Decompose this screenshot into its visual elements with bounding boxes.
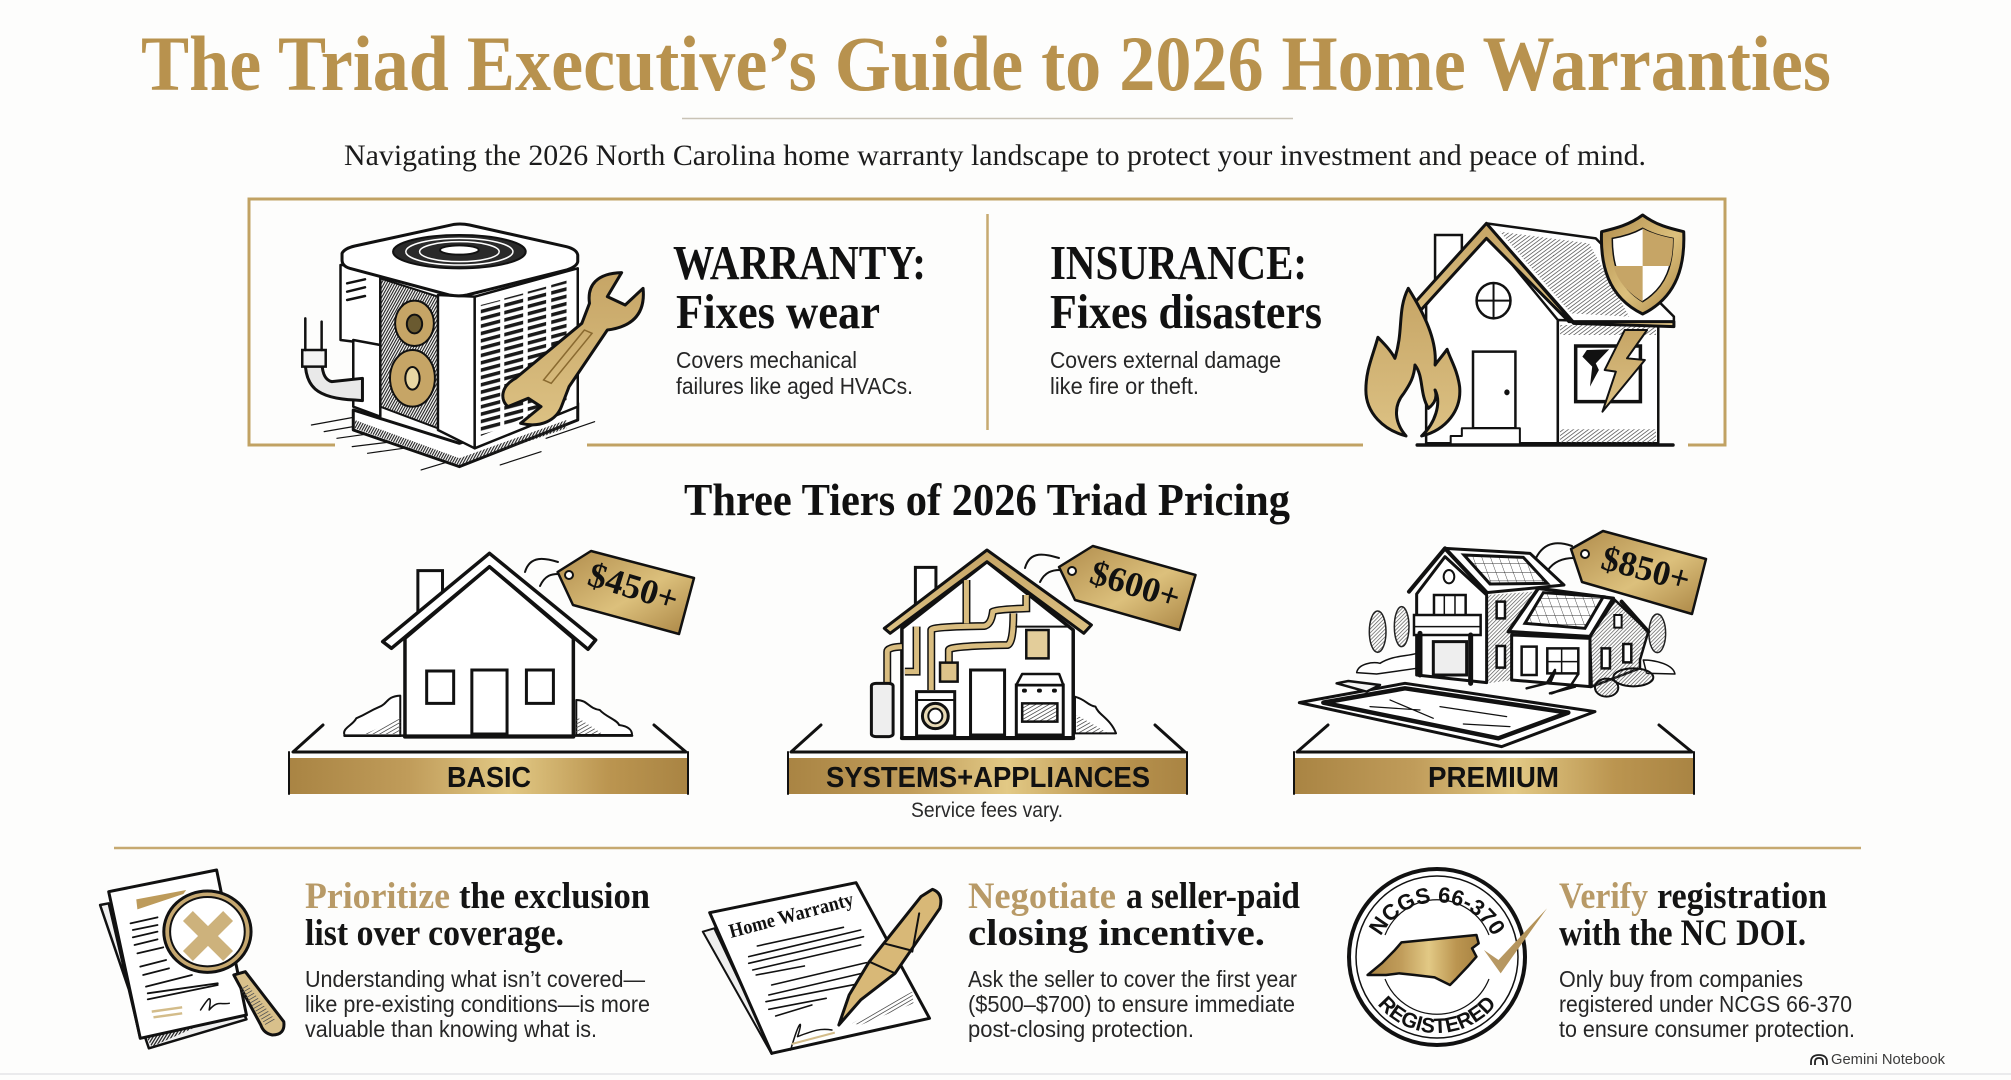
tip heading: Verify xyxy=(1559,876,1648,917)
icon: document under magnifying glass xyxy=(100,870,284,1048)
icon: warranty document and pen: Home Warranty xyxy=(727,888,856,943)
icon: HVAC unit with wrench xyxy=(302,224,643,470)
panel frame xyxy=(249,199,1725,445)
tip heading xyxy=(305,876,650,954)
section heading: pricing tiers: Three Tiers of 2026 Triad Pricing xyxy=(684,475,1290,525)
icon: price tag xyxy=(1536,531,1706,614)
warranty text xyxy=(673,235,926,399)
subtitle: Navigating the 2026 North Carolina home warranty landscape to protect your investment and peace of mind. xyxy=(344,139,1646,172)
watermark: Gemini Notebook: Gemini Notebook xyxy=(1831,1052,1946,1068)
tip heading: registration xyxy=(1657,876,1827,917)
icon: price tag: $450+ xyxy=(584,555,683,619)
icon: price tag: $850+ xyxy=(1597,538,1694,599)
insurance text: INSURANCE: xyxy=(1050,235,1307,290)
tip heading: Prioritize xyxy=(305,876,450,917)
tip: prioritize exclusions xyxy=(100,870,650,1048)
title: The Triad Executive’s Guide to 2026 Home Warranties xyxy=(141,20,1831,107)
tip heading: closing incentive. xyxy=(968,913,1265,954)
tier plate xyxy=(788,725,1187,794)
tip heading: a seller-paid xyxy=(1126,876,1300,917)
warranty text: failures like aged HVACs. xyxy=(676,373,913,399)
insurance text: Covers external damage xyxy=(1050,347,1281,373)
icon: house with systems and appliances xyxy=(871,550,1116,738)
icon: basic house xyxy=(344,553,632,737)
icon: warranty document and pen xyxy=(703,883,941,1054)
warranty text: WARRANTY: xyxy=(673,235,926,290)
tier: systems + appliances xyxy=(788,546,1196,822)
tip: verify registration xyxy=(1347,867,1855,1047)
tip heading: list over coverage. xyxy=(305,913,564,954)
insurance text xyxy=(1050,235,1322,399)
tip heading xyxy=(1559,876,1827,954)
tip body: to ensure consumer protection. xyxy=(1559,1016,1855,1042)
icon: premium house with solar and pool xyxy=(1299,548,1675,747)
icon: price tag xyxy=(1025,546,1196,630)
icon: NCGS registered stamp: NCGS 66-370 xyxy=(1368,887,1504,936)
tip heading: with the NC DOI. xyxy=(1559,913,1806,954)
tier plate: PREMIUM xyxy=(1428,762,1559,794)
icon: NCGS registered stamp xyxy=(1347,867,1547,1047)
tip body: like pre-existing conditions—is more xyxy=(305,991,650,1017)
icon: price tag: $600+ xyxy=(1086,553,1185,617)
warranty text: Covers mechanical xyxy=(676,347,857,373)
insurance text: like fire or theft. xyxy=(1050,373,1199,399)
tip body: Understanding what isn’t covered— xyxy=(305,966,645,992)
tip body: post-closing protection. xyxy=(968,1016,1194,1042)
tip heading xyxy=(968,876,1300,954)
icon: NCGS registered stamp: REGISTERED xyxy=(1378,996,1494,1033)
tier plate: BASIC xyxy=(447,762,531,794)
panel: warranty vs insurance xyxy=(249,199,1725,470)
tip body xyxy=(968,966,1297,1042)
tip body: registered under NCGS 66-370 xyxy=(1559,991,1852,1017)
tip body: Only buy from companies xyxy=(1559,966,1803,992)
warranty text: Fixes wear xyxy=(676,284,880,339)
tip body: ($500–$700) to ensure immediate xyxy=(968,991,1295,1017)
tier plate xyxy=(1294,725,1694,794)
tier: premium xyxy=(1294,531,1706,794)
tip heading: Negotiate xyxy=(968,876,1116,917)
tip body: valuable than knowing what is. xyxy=(305,1016,597,1042)
icon: house with fire, shield and lightning xyxy=(1366,215,1684,445)
tier plate xyxy=(289,725,688,794)
tip heading: the exclusion xyxy=(459,876,650,917)
tip body xyxy=(305,966,650,1042)
tier plate: SYSTEMS+APPLIANCES xyxy=(826,762,1150,794)
icon: price tag xyxy=(525,551,694,634)
tier: basic xyxy=(289,551,694,794)
insurance text: Fixes disasters xyxy=(1050,284,1322,339)
tip body: Ask the seller to cover the first year xyxy=(968,966,1297,992)
tip: negotiate seller incentive xyxy=(703,876,1300,1054)
tip body xyxy=(1559,966,1855,1042)
note: service fees: Service fees vary. xyxy=(911,799,1063,822)
